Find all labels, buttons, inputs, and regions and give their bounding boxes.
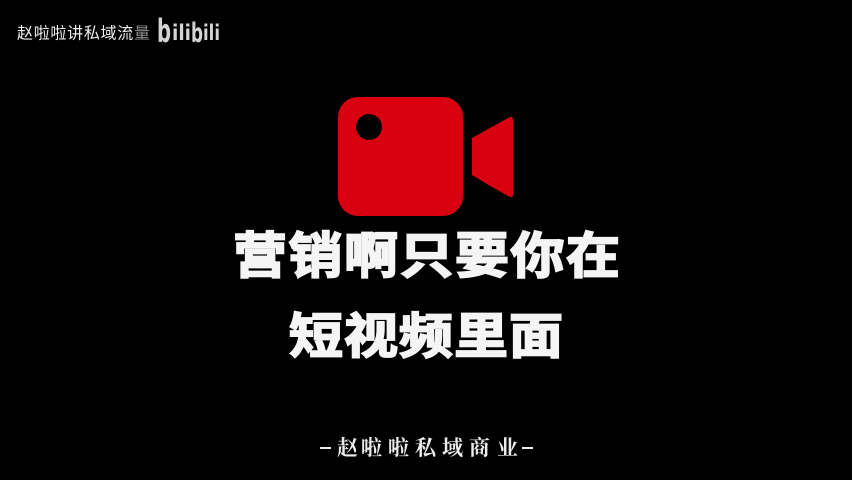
right dash (522, 447, 533, 449)
bilibili logo: b (191, 18, 203, 49)
headline (233, 228, 620, 363)
signature text: 赵啦啦私域商业 (337, 436, 518, 460)
camera viewfinder (472, 117, 513, 197)
bilibili logo: ili (172, 21, 191, 45)
icon: red video camera (338, 97, 513, 216)
camera body with lens hole (338, 97, 463, 216)
channel watermark (17, 12, 220, 50)
headline line 2: 短视频里面 (289, 310, 563, 363)
left dash (320, 447, 331, 449)
bilibili logo: ili (203, 21, 220, 45)
bilibili logo (157, 12, 220, 50)
headline line 1: 营销啊只要你在 (233, 228, 620, 284)
bilibili logo: b (157, 12, 171, 50)
channel name: 赵啦啦讲私域流量 (17, 24, 150, 42)
